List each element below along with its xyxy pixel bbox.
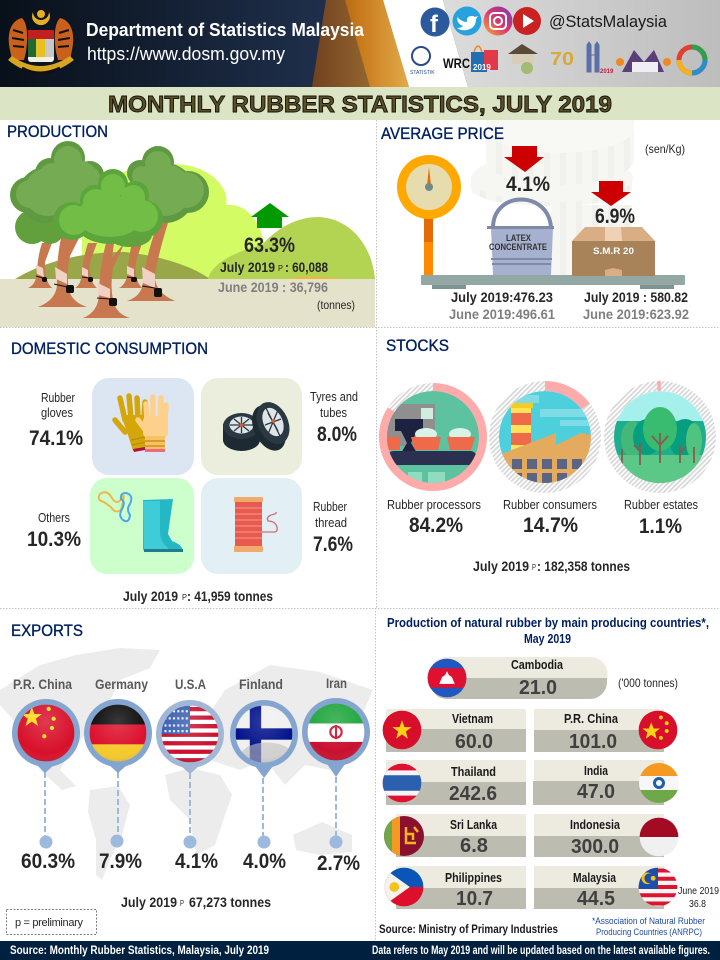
producer: Sri Lanka: Sri Lanka	[450, 817, 498, 832]
destination: P.R. China	[12, 677, 80, 873]
logos row: WRC	[443, 55, 470, 71]
producer: Philippines: 10.7	[456, 888, 493, 910]
main title: MONTHLY RUBBER STATISTICS, JULY 2019	[108, 91, 612, 117]
icon: instagram	[484, 6, 512, 36]
price unit: (sen/Kg)	[645, 142, 685, 156]
note: malaysia june: 36.8	[689, 898, 706, 910]
producer: Sri Lanka	[384, 814, 526, 857]
destination: P.R. China: 60.3%	[21, 850, 75, 873]
label: tyres and tubes	[310, 390, 358, 446]
label: rubber thread: Rubber	[313, 500, 347, 514]
producer: P.R. China: P.R. China	[564, 711, 619, 726]
logos row: 70	[550, 49, 574, 69]
producers title	[387, 616, 709, 646]
exports total: 67,273 tonnes	[189, 895, 271, 910]
destination: Iran: Iran	[326, 676, 347, 691]
panel: producing countries	[379, 616, 719, 937]
label: rubber thread: 7.6%	[313, 533, 353, 556]
footer bar	[0, 941, 720, 960]
production july	[220, 260, 328, 275]
icon: coat of arms	[8, 10, 74, 73]
label: rubber thread: thread	[315, 516, 347, 530]
header title: Department of Statistics Malaysia	[86, 20, 365, 40]
destination: Germany: 7.9%	[99, 850, 142, 873]
label: rubber gloves: 74.1%	[29, 427, 83, 450]
destination: Iran	[302, 676, 370, 875]
stocks total: : 182,358 tonnes	[537, 559, 630, 574]
icon: latex bucket: LATEX	[506, 233, 531, 243]
header banner	[0, 0, 720, 87]
label: consumers: 14.7%	[523, 514, 578, 537]
producer: Malaysia	[534, 866, 677, 910]
label: consumers	[503, 498, 597, 537]
latex price values	[449, 290, 555, 322]
producer: Vietnam: 60.0	[455, 731, 493, 753]
anrpc note	[592, 916, 705, 937]
destination: Finland: 4.0%	[243, 850, 286, 873]
producer: Indonesia: 300.0	[571, 836, 619, 858]
domestic total	[123, 589, 273, 604]
production july: : 60,088	[285, 260, 328, 275]
stocks total	[473, 559, 630, 574]
label: others: 10.3%	[27, 528, 81, 551]
destination: U.S.A	[156, 677, 224, 873]
producer: India: India	[584, 763, 609, 778]
label: rubber gloves	[29, 391, 83, 450]
arrow: smr down	[591, 181, 631, 206]
arrow: production up	[251, 203, 289, 228]
latex price values: July 2019:476.23	[451, 290, 553, 305]
world map background	[0, 648, 373, 880]
panel: average price	[381, 103, 689, 322]
producer: P.R. China: 101.0	[569, 731, 617, 753]
label: tyres and tubes: Tyres and	[310, 390, 358, 404]
tile: others	[90, 478, 194, 574]
logos row: STATISTIK	[410, 70, 435, 76]
anrpc note: Producing Countries (ANRPC)	[596, 927, 702, 937]
producer: India: 47.0	[577, 781, 615, 803]
donut: rubber consumers	[494, 386, 596, 488]
icon: SMR 20 box	[572, 227, 655, 276]
latex price values: June 2019:496.61	[449, 307, 555, 322]
legend: preliminary: p = preliminary	[15, 917, 84, 929]
producers source: Source: Ministry of Primary Industries	[379, 922, 558, 936]
smr change: 6.9%	[595, 205, 635, 228]
production heading: PRODUCTION	[7, 122, 108, 141]
footer source: Source: Monthly Rubber Statistics, Malaysia, July 2019	[10, 943, 269, 957]
exports heading: EXPORTS	[11, 621, 83, 640]
exports total	[121, 895, 271, 910]
label: others: Others	[38, 511, 70, 525]
destination: Finland	[230, 677, 298, 873]
producer: Vietnam	[383, 709, 526, 753]
production scene	[0, 141, 375, 327]
domestic heading: DOMESTIC CONSUMPTION	[11, 339, 208, 358]
coins background	[471, 103, 634, 275]
social handle: @StatsMalaysia	[549, 12, 668, 31]
producer: Sri Lanka: 6.8	[460, 835, 488, 857]
icon: SMR 20 box: S.M.R 20	[593, 246, 634, 257]
anrpc note: *Association of Natural Rubber	[592, 916, 705, 926]
production july: July 2019	[220, 260, 275, 275]
smr price values	[583, 290, 689, 322]
production unit: (tonnes)	[317, 298, 355, 312]
destination: Germany	[84, 677, 152, 873]
icon: weighing scale	[397, 155, 685, 289]
producer: Indonesia: Indonesia	[570, 817, 621, 832]
stocks total: July 2019	[473, 559, 529, 574]
latex change: 4.1%	[506, 173, 550, 196]
panel: stocks	[384, 336, 714, 574]
producer: P.R. China	[534, 709, 677, 753]
producer: Malaysia: 44.5	[577, 888, 615, 910]
destination: Iran: 2.7%	[317, 852, 360, 875]
label: tyres and tubes: 8.0%	[317, 423, 357, 446]
producer: India	[533, 760, 679, 805]
smr price values: June 2019:623.92	[583, 307, 689, 322]
panel: domestic consumption	[11, 339, 358, 604]
icon: facebook: f	[430, 11, 439, 38]
trees	[10, 141, 209, 318]
label: consumers: Rubber consumers	[503, 498, 597, 512]
exports total: P	[180, 899, 184, 908]
title band	[0, 87, 720, 120]
tile: thread	[201, 478, 302, 574]
label: tyres and tubes: tubes	[320, 406, 347, 420]
donut: rubber processors	[384, 388, 482, 486]
destination: Germany: Germany	[95, 677, 148, 692]
tile: tyres	[201, 378, 302, 475]
logos row	[410, 42, 705, 76]
label: processors: Rubber processors	[387, 498, 481, 512]
icon: facebook	[420, 8, 450, 38]
producer: Cambodia: 21.0	[519, 677, 557, 699]
destination: U.S.A: 4.1%	[175, 850, 218, 873]
producer: Indonesia	[534, 814, 678, 858]
note: malaysia june	[678, 885, 719, 910]
producers unit: ('000 tonnes)	[618, 676, 678, 690]
label: estates	[624, 498, 698, 538]
smr price values: July 2019 : 580.82	[584, 290, 688, 305]
producer: Thailand	[383, 760, 526, 805]
producer: Philippines: Philippines	[445, 870, 502, 885]
label: processors	[387, 498, 481, 537]
icon: latex bucket	[487, 200, 554, 275]
stocks heading: STOCKS	[386, 336, 449, 355]
header url: https://www.dosm.gov.my	[87, 44, 285, 64]
exports total: July 2019	[121, 895, 177, 910]
production change: 63.3%	[244, 234, 295, 257]
donut: rubber estates	[606, 383, 714, 491]
label: others	[27, 511, 81, 551]
production july: P	[278, 264, 283, 273]
tile: gloves	[92, 378, 194, 475]
panel: production	[0, 122, 375, 327]
label: estates: 1.1%	[639, 515, 682, 538]
label: rubber gloves: gloves	[41, 406, 73, 420]
producers title: May 2019	[524, 632, 571, 646]
label: rubber thread	[313, 500, 353, 556]
production june: June 2019 : 36,796	[218, 280, 328, 295]
stocks total: P	[532, 563, 536, 572]
label: rubber gloves: Rubber	[41, 391, 75, 405]
icon: twitter	[452, 6, 482, 36]
destination: P.R. China: P.R. China	[13, 677, 72, 692]
logos row: 2019	[600, 69, 614, 75]
producer: Cambodia: Cambodia	[511, 657, 564, 672]
average price heading: AVERAGE PRICE	[381, 124, 504, 143]
legend: preliminary	[6, 910, 96, 934]
arrow: latex down	[504, 146, 544, 172]
icon: latex bucket: CONCENTRATE	[489, 242, 547, 252]
label: estates: Rubber estates	[624, 498, 698, 512]
producer: Malaysia: Malaysia	[573, 870, 617, 885]
destination: U.S.A: U.S.A	[175, 677, 206, 692]
icon: youtube	[513, 7, 541, 35]
producer: Vietnam: Vietnam	[452, 711, 493, 726]
domestic total: July 2019	[123, 589, 178, 604]
domestic total: P	[182, 593, 187, 602]
producer: Philippines	[383, 866, 526, 910]
logos row: 2019	[473, 63, 491, 72]
destination: Finland: Finland	[239, 677, 283, 692]
producer: Thailand: Thailand	[451, 764, 496, 779]
producer: Cambodia	[428, 657, 607, 699]
domestic total: : 41,959 tonnes	[187, 589, 273, 604]
producer: Thailand: 242.6	[449, 783, 497, 805]
panel: exports	[0, 621, 373, 934]
label: processors: 84.2%	[409, 514, 463, 537]
